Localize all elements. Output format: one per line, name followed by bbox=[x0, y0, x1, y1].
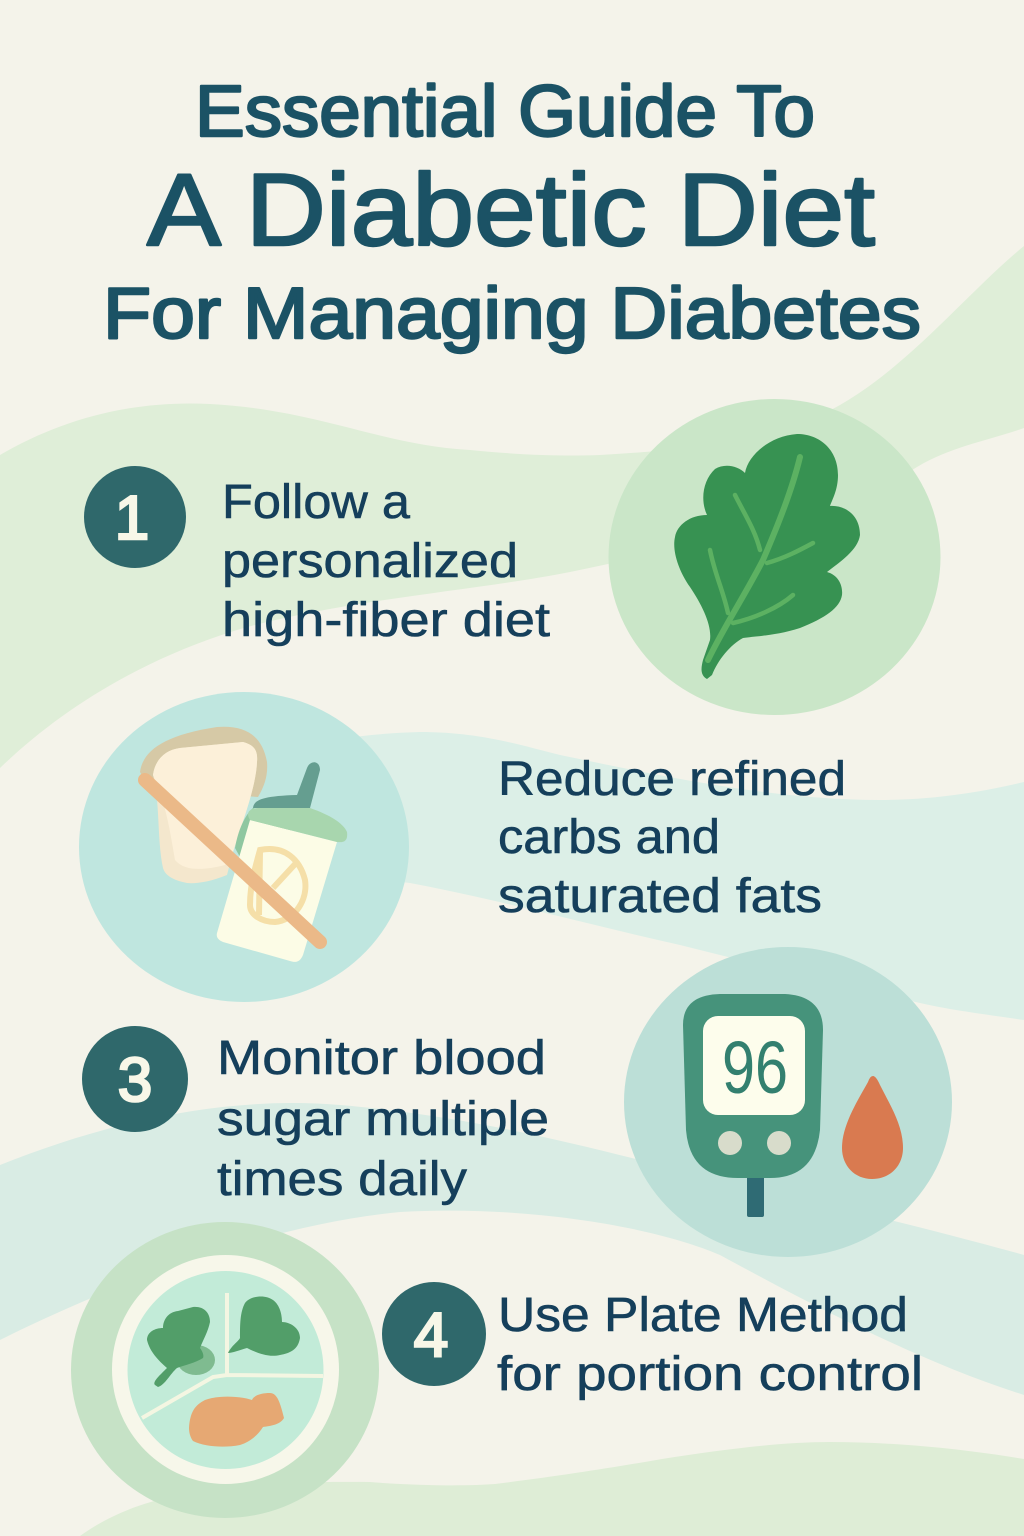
step 1 badge bbox=[84, 466, 186, 568]
wave: lower teal band bbox=[0, 1103, 1024, 1395]
step 1 text: Follow a bbox=[222, 476, 410, 529]
icon: crossed-out bread and drink bbox=[79, 692, 409, 1002]
step 3 text: Monitor blood bbox=[217, 1032, 546, 1085]
title line 2: A Diabetic Diet bbox=[147, 153, 875, 267]
step 3 text: times daily bbox=[217, 1153, 467, 1206]
no symbol on cup bbox=[250, 849, 305, 922]
bread bbox=[140, 727, 267, 797]
title line 1: Essential Guide To bbox=[195, 72, 815, 152]
title line 3: For Managing Diabetes bbox=[103, 274, 921, 354]
slash bbox=[145, 780, 320, 942]
step 2 text: Reduce refined bbox=[498, 753, 846, 806]
step 4 text bbox=[497, 1289, 923, 1401]
wave: middle teal band bbox=[300, 732, 1024, 1020]
step 1 text bbox=[222, 476, 550, 647]
drink straw and lid bbox=[253, 762, 320, 808]
wave: bottom green band bbox=[80, 1442, 1024, 1536]
step 2 text: carbs and bbox=[498, 811, 720, 864]
icon: glucose meter and blood drop: 96 bbox=[722, 1026, 788, 1109]
step 3 text bbox=[217, 1032, 549, 1206]
step 1 badge: 1 bbox=[115, 484, 149, 553]
step 1 text: high-fiber diet bbox=[222, 594, 550, 647]
step 4 text: Use Plate Method bbox=[498, 1289, 908, 1342]
step 4 text: for portion control bbox=[497, 1348, 923, 1401]
step 3 text: sugar multiple bbox=[217, 1093, 549, 1146]
icon: glucose meter and blood drop bbox=[624, 947, 952, 1257]
step 3 badge: 3 bbox=[118, 1046, 152, 1115]
step 3 badge bbox=[82, 1026, 188, 1132]
step 2 text bbox=[498, 753, 846, 923]
icon: leaf bbox=[608, 399, 940, 715]
step 4 badge bbox=[382, 1282, 486, 1386]
title bbox=[103, 72, 921, 354]
icon: plate method bbox=[71, 1222, 379, 1518]
step 4 badge: 4 bbox=[414, 1301, 448, 1370]
step 1 text: personalized bbox=[222, 535, 518, 588]
step 2 text: saturated fats bbox=[498, 870, 822, 923]
wave: top green band bbox=[0, 246, 1024, 768]
